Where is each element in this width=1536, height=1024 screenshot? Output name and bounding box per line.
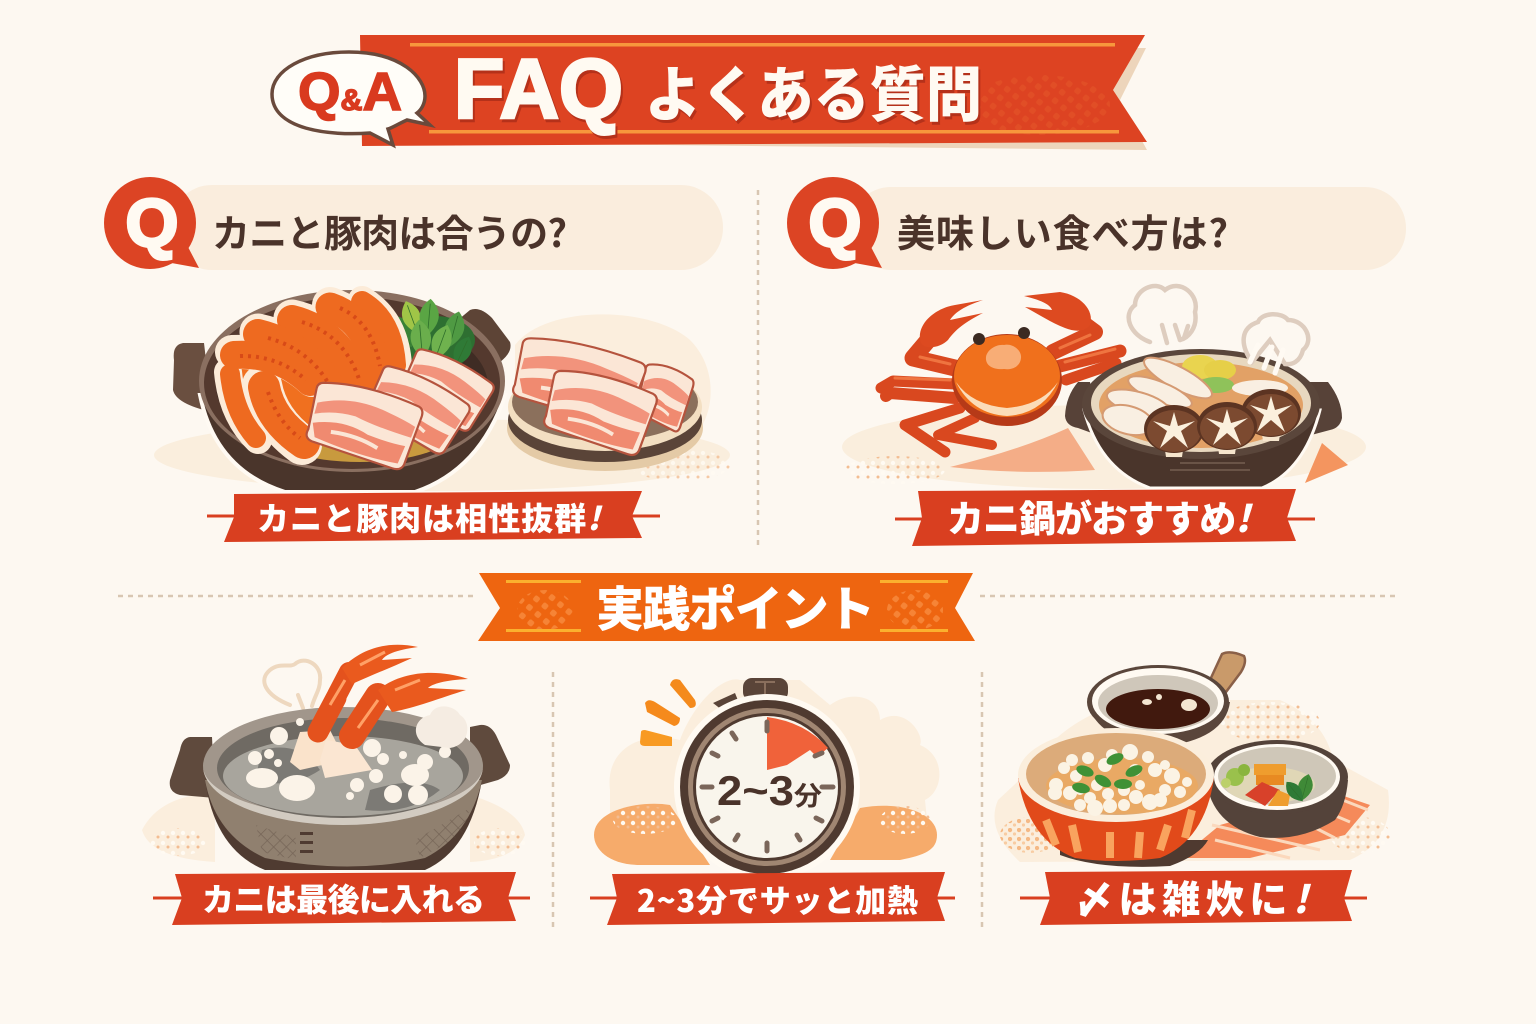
question text: カニと豚肉は合うの? xyxy=(212,203,567,258)
Q badge xyxy=(787,177,882,269)
clock face xyxy=(674,694,860,880)
pot xyxy=(1065,349,1342,488)
speech bubble: Q&A: Q&A xyxy=(298,62,402,122)
ribbon: tip 1 xyxy=(153,872,530,925)
ribbon: tip 3: 〆は雑炊に! xyxy=(1075,869,1312,924)
section banner: 実践ポイント: 実践ポイント xyxy=(596,570,875,640)
illustration: boiling crab pot xyxy=(142,645,526,870)
title banner xyxy=(360,35,1147,150)
rays xyxy=(640,679,696,746)
ribbon: answer 1 xyxy=(207,491,660,542)
crab legs xyxy=(228,300,398,445)
pill background xyxy=(170,185,723,270)
small side dish xyxy=(1206,740,1348,838)
illustration: crab and crab hot pot xyxy=(842,286,1366,489)
sauce bowl xyxy=(1087,652,1245,747)
Q badge: Q xyxy=(126,185,178,261)
illustration: zosui bowls xyxy=(994,652,1390,867)
question 1 header xyxy=(104,177,723,270)
plate of pork xyxy=(507,335,703,471)
ribbon: tip 1: カニは最後に入れる xyxy=(202,875,485,921)
ribbon: tip 3 xyxy=(1020,869,1367,925)
clock face: 2~3分 xyxy=(717,767,822,814)
steam xyxy=(264,661,320,708)
rice bowl xyxy=(1018,728,1214,867)
crab legs xyxy=(290,645,468,778)
steam right xyxy=(1244,314,1308,373)
ribbon: tip 2 xyxy=(590,872,955,925)
illustration: crab and pork hot pot xyxy=(154,290,730,492)
crab xyxy=(881,292,1120,452)
heading: よくある質問: よくある質問 xyxy=(645,47,982,134)
bubbles xyxy=(246,718,451,805)
question text: 美味しい食べ方は? xyxy=(897,203,1228,258)
section banner: 実践ポイント xyxy=(478,570,975,641)
speech bubble: Q&A xyxy=(272,52,430,145)
striped mat xyxy=(1180,793,1370,858)
crown xyxy=(713,678,788,716)
Q badge xyxy=(104,177,199,269)
heading: FAQ: FAQ xyxy=(454,42,623,136)
question 2 header xyxy=(787,177,1406,270)
pot ingredients xyxy=(1099,350,1301,457)
illustration: timer xyxy=(594,678,939,880)
pork slices in pot xyxy=(303,345,498,472)
Q badge: Q xyxy=(809,185,861,261)
pot xyxy=(170,707,510,870)
steam puff right xyxy=(416,706,467,748)
pill background xyxy=(850,187,1406,270)
ribbon: answer 2: カニ鍋がおすすめ! xyxy=(947,489,1253,543)
ribbon: answer 2 xyxy=(895,489,1315,546)
greens xyxy=(385,298,477,370)
ribbon: tip 2: 2~3分でサッと加熱 xyxy=(637,876,918,921)
steam left xyxy=(1129,286,1196,343)
ribbon: answer 1: カニと豚肉は相性抜群! xyxy=(257,494,603,540)
pot xyxy=(173,290,511,492)
